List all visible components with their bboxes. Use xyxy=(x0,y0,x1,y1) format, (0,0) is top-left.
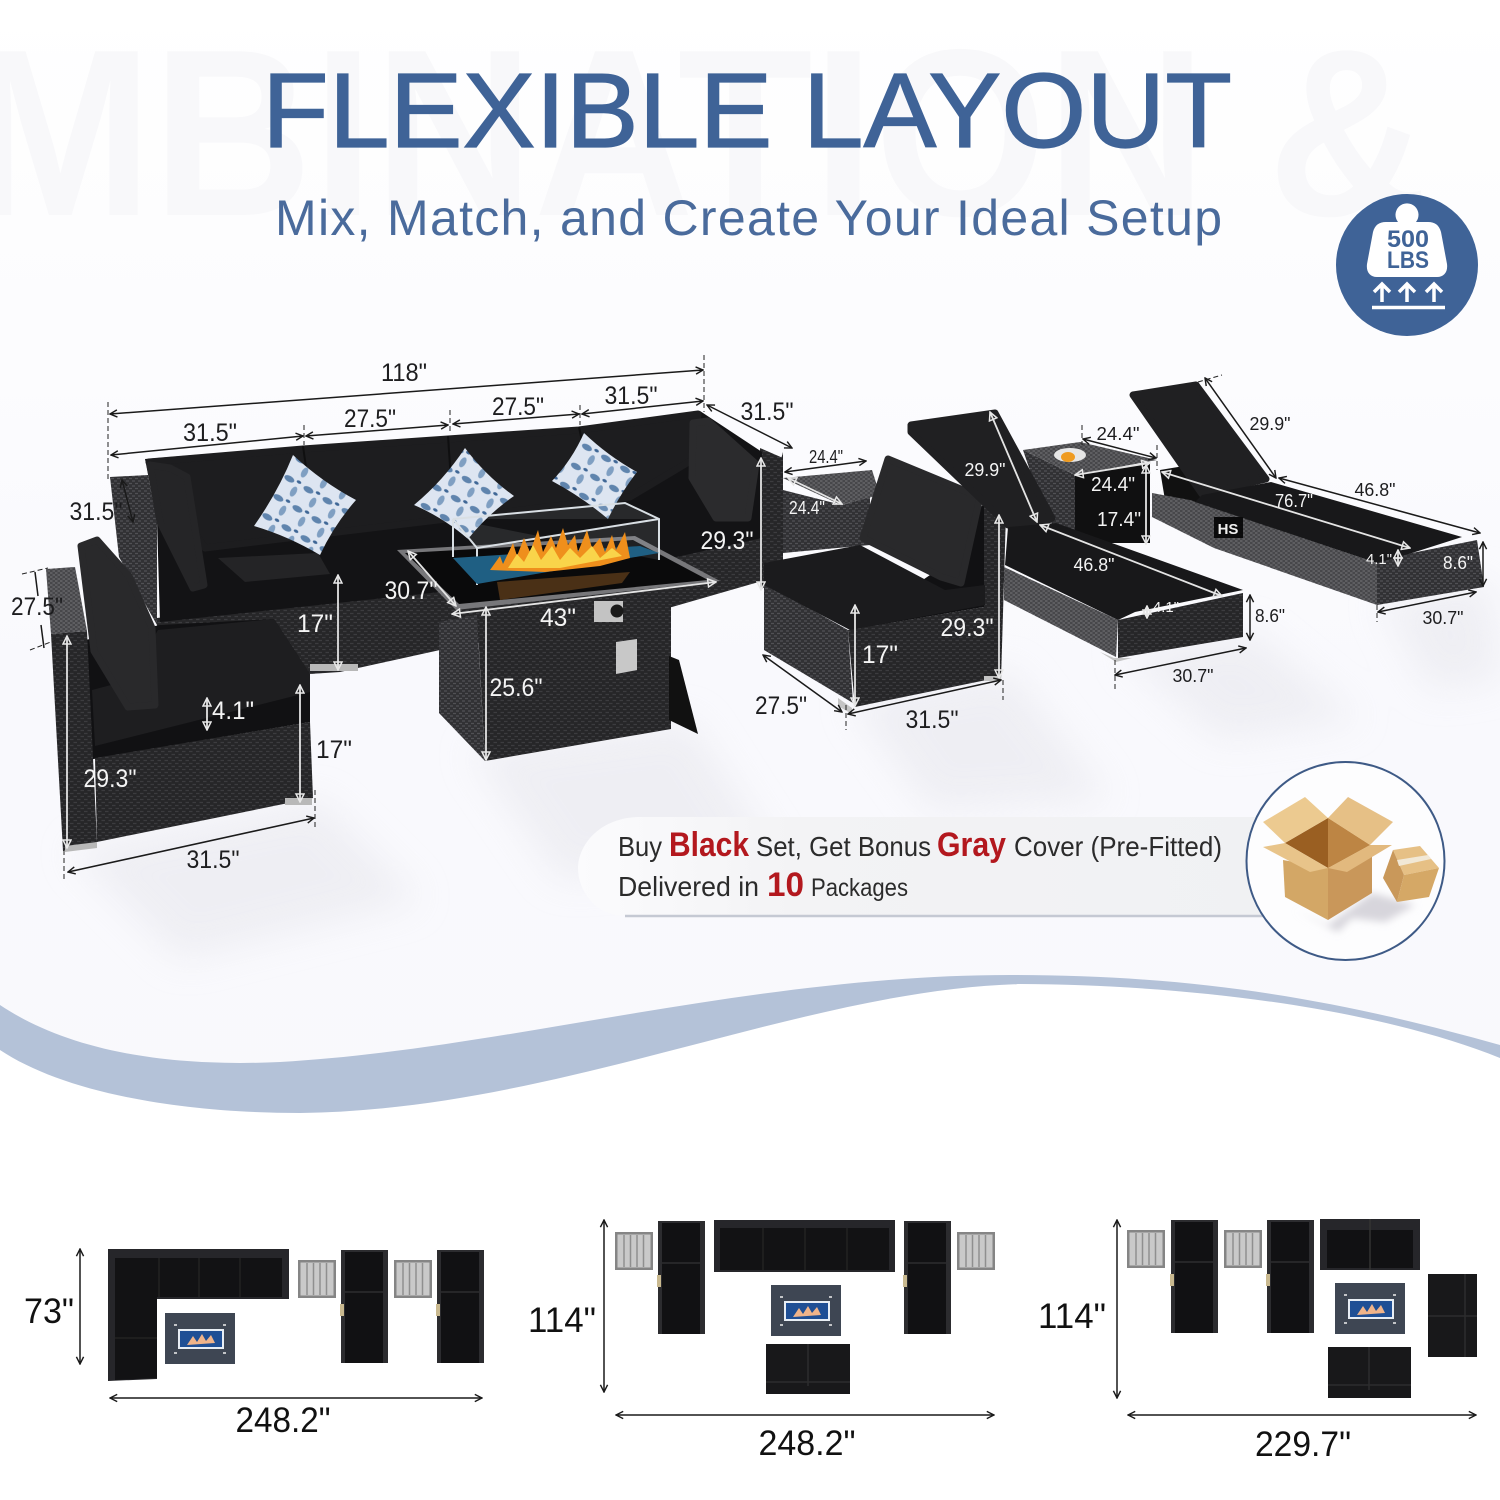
dimension labels: chair, loungers, tables: 29.9" xyxy=(964,460,1006,480)
glass guard xyxy=(453,503,659,585)
callout: bonus cover and packages xyxy=(578,817,1290,916)
side table right xyxy=(1023,442,1157,543)
layout option 3 xyxy=(1038,1219,1477,1464)
inner flames xyxy=(508,545,622,568)
base front xyxy=(1118,593,1243,658)
fire pit top view xyxy=(1335,1283,1405,1334)
arm top xyxy=(46,567,87,634)
weight unit: LBS xyxy=(1387,247,1429,274)
table top xyxy=(783,470,880,505)
middle chair xyxy=(764,459,1006,714)
icon: weight xyxy=(1367,203,1447,277)
dimension labels: sofa and front chair: 43" xyxy=(540,604,576,632)
dimension labels: sofa and front chair: 25.6" xyxy=(490,674,542,702)
seat well xyxy=(85,619,310,760)
pillow 1 xyxy=(254,455,356,555)
flame reflection xyxy=(497,572,630,600)
table top xyxy=(1023,442,1157,475)
seat flap xyxy=(218,553,330,582)
base front xyxy=(848,607,1001,707)
sofa top view xyxy=(714,1220,895,1272)
dimension labels: sofa and front chair: 31.5" xyxy=(70,498,122,526)
subtitle: Mix, Match, and Create Your Ideal Setup xyxy=(275,190,1222,246)
lounger 2 xyxy=(1133,385,1484,605)
height dimension xyxy=(1116,1220,1118,1398)
dimension labels: chair, loungers, tables: 24.4" xyxy=(1096,424,1140,444)
fruit xyxy=(1061,452,1075,462)
dimension labels: chair, loungers, tables: 76.7" xyxy=(1275,491,1313,511)
lower white area xyxy=(0,984,1500,1500)
width dimension xyxy=(110,1397,482,1399)
dimension labels: sofa and front chair: 17" xyxy=(297,610,333,638)
dimension labels: chair, loungers, tables: 4.1" xyxy=(1153,599,1179,616)
metal foot xyxy=(1100,652,1132,662)
dimension labels: chair, loungers, tables xyxy=(755,414,1473,734)
base front xyxy=(1377,540,1484,605)
back cushion xyxy=(863,459,980,583)
dimension labels: sofa and front chair: 29.3" xyxy=(700,527,754,555)
callout pill xyxy=(578,817,1290,916)
height dimension xyxy=(603,1220,605,1392)
height label: 73" xyxy=(24,1292,74,1331)
lounger top view xyxy=(657,1221,705,1334)
title: FLEXIBLE LAYOUT xyxy=(262,52,1232,170)
sofa wicker base xyxy=(157,452,783,674)
callout line 2: 10 xyxy=(767,866,804,904)
L sofa top view xyxy=(108,1249,289,1381)
callout line 1: Cover (Pre-Fitted) xyxy=(1014,831,1222,862)
body front xyxy=(477,590,671,761)
callout line 2: Delivered in xyxy=(618,871,759,902)
table top view xyxy=(394,1260,432,1298)
dimension labels: chair, loungers, tables: 46.8" xyxy=(1354,480,1396,500)
right side cushion xyxy=(692,421,756,518)
lounger 1 xyxy=(911,413,1243,662)
main sectional sofa xyxy=(110,411,783,674)
height dimension xyxy=(79,1249,81,1364)
loveseat top view xyxy=(766,1344,850,1394)
lounger top view xyxy=(1266,1220,1314,1333)
dimension labels: chair, loungers, tables: 8.6" xyxy=(1443,553,1473,573)
callout line 1: Gray xyxy=(937,826,1006,864)
width dimension xyxy=(616,1414,994,1416)
table top view xyxy=(1127,1230,1165,1268)
dimension labels: chair, loungers, tables: 46.8" xyxy=(1074,555,1114,575)
loveseat top view xyxy=(1320,1219,1420,1270)
base side xyxy=(764,583,853,703)
dimension labels: chair, loungers, tables: 30.7" xyxy=(1172,666,1214,686)
wave band xyxy=(0,975,1500,1113)
weight value: 500 xyxy=(1387,226,1429,253)
flames xyxy=(490,528,630,572)
dimension lines: sofa top xyxy=(22,355,792,650)
brand text: HS xyxy=(1218,521,1238,538)
dimension labels: sofa and front chair: 31.5" xyxy=(186,846,240,874)
dimension labels: chair, loungers, tables: 27.5" xyxy=(755,692,807,720)
pillow 2 xyxy=(414,448,514,539)
fire pit table xyxy=(397,503,720,761)
callout line 2: Packages xyxy=(811,874,908,902)
side loveseat top view xyxy=(1428,1274,1477,1357)
seat cushion xyxy=(1195,482,1462,563)
metal feet xyxy=(838,676,1001,714)
callout line 1 xyxy=(618,826,1222,864)
callout line 2 xyxy=(618,866,908,904)
dimension labels: sofa and front chair: 30.7" xyxy=(384,577,438,605)
box shadow xyxy=(1295,893,1415,932)
layout option 2 xyxy=(528,1220,995,1463)
base side xyxy=(1152,493,1377,605)
backrest xyxy=(911,413,1052,525)
callout line 1: Buy xyxy=(618,831,662,862)
lounger top view xyxy=(903,1221,951,1334)
backrest xyxy=(1133,385,1266,494)
right arm xyxy=(984,503,1006,680)
dimension labels: sofa and front chair xyxy=(11,359,794,874)
width label: 229.7" xyxy=(1255,1425,1351,1464)
dimension labels: chair, loungers, tables: 17.4" xyxy=(1097,509,1141,531)
dimension labels: chair, loungers, tables: 24.4" xyxy=(1091,474,1135,496)
front corner chair xyxy=(46,540,313,852)
base front xyxy=(95,722,313,842)
left arm xyxy=(110,475,157,625)
dimension labels: sofa and front chair: 27.5" xyxy=(492,393,544,421)
dimension labels: sofa and front chair: 31.5" xyxy=(740,398,794,426)
badge: 500 lbs capacity xyxy=(1336,194,1478,336)
dimension labels: sofa and front chair: 29.3" xyxy=(84,765,136,793)
lid cover xyxy=(669,656,698,734)
dimension labels: chair, loungers, tables: 24.4" xyxy=(789,498,825,518)
icon: cardboard boxes in circle xyxy=(1246,762,1444,960)
width label: 248.2" xyxy=(236,1401,330,1440)
seat cushion xyxy=(764,545,985,630)
dimension labels: chair, loungers, tables: 4.1" xyxy=(1366,551,1392,568)
dimension labels: sofa and front chair: 31.5" xyxy=(183,419,237,447)
dimension labels: sofa and front chair: 17" xyxy=(316,736,352,764)
back cushions xyxy=(149,414,698,548)
fire pit top view xyxy=(165,1313,235,1364)
lounger top view xyxy=(436,1250,484,1363)
table top view xyxy=(1224,1230,1262,1268)
dimension labels: sofa and front chair: 27.5" xyxy=(11,593,63,621)
dimension lines: black furniture arrows xyxy=(64,375,1483,880)
layout option 1 xyxy=(24,1249,484,1440)
floor shadows xyxy=(70,580,1500,960)
table top view xyxy=(957,1232,995,1270)
side table left xyxy=(783,470,880,553)
height label: 114" xyxy=(1038,1297,1106,1336)
dimension labels: sofa and front chair: 27.5" xyxy=(344,405,396,433)
metal foot xyxy=(65,798,312,852)
dimension labels: chair, loungers, tables: 31.5" xyxy=(906,706,958,734)
sofa silhouette xyxy=(145,411,762,622)
table body xyxy=(783,490,870,553)
metal foot xyxy=(310,664,358,671)
width label: 248.2" xyxy=(758,1424,856,1463)
width dimension xyxy=(1128,1414,1476,1416)
lounger top view xyxy=(340,1250,388,1363)
right arm xyxy=(760,448,783,590)
arm side xyxy=(51,631,97,851)
height label: 114" xyxy=(528,1301,596,1340)
fruit plate xyxy=(1054,448,1086,462)
lounger top view xyxy=(1170,1220,1218,1333)
left side cushion xyxy=(150,465,204,588)
dimension labels: chair, loungers, tables: 17" xyxy=(862,641,898,669)
small box xyxy=(1383,846,1439,902)
dimension labels: sofa and front chair: 31.5" xyxy=(604,382,658,410)
callout line 1: Black xyxy=(669,826,749,864)
back cushion xyxy=(81,540,155,707)
dimension lines: white furniture arrows xyxy=(67,412,1410,848)
fire pit top view xyxy=(771,1285,841,1336)
control knob xyxy=(594,601,623,622)
dimension labels: chair, loungers, tables: 24.4" xyxy=(809,447,843,467)
frame stand xyxy=(1160,465,1205,505)
dimension labels: chair, loungers, tables: 8.6" xyxy=(1255,606,1285,626)
table top view xyxy=(615,1232,653,1270)
table left side xyxy=(1023,450,1075,543)
dimension labels: chair, loungers, tables: 30.7" xyxy=(1422,608,1464,628)
seat cushion xyxy=(92,619,310,746)
table front xyxy=(1075,463,1150,543)
label plate xyxy=(616,639,637,674)
dimension labels: sofa and front chair: 118" xyxy=(381,359,427,387)
table top view xyxy=(298,1260,336,1298)
table top xyxy=(397,536,720,610)
open box xyxy=(1263,797,1393,920)
dimension labels: chair, loungers, tables: 29.9" xyxy=(1250,414,1290,434)
pillow 3 xyxy=(552,433,637,519)
brand tag xyxy=(1214,517,1243,538)
dimension labels: chair, loungers, tables: 29.3" xyxy=(940,614,994,642)
seat well xyxy=(850,503,984,630)
bottom loveseat top view xyxy=(1328,1347,1411,1398)
burner stones xyxy=(453,546,659,584)
seat cushion xyxy=(1005,523,1243,620)
icon: up arrows xyxy=(1372,284,1445,308)
dimension labels: sofa and front chair: 4.1" xyxy=(212,697,254,725)
body left side xyxy=(439,615,485,761)
base side xyxy=(1004,567,1118,657)
callout line 1: Set, Get Bonus xyxy=(756,831,931,862)
